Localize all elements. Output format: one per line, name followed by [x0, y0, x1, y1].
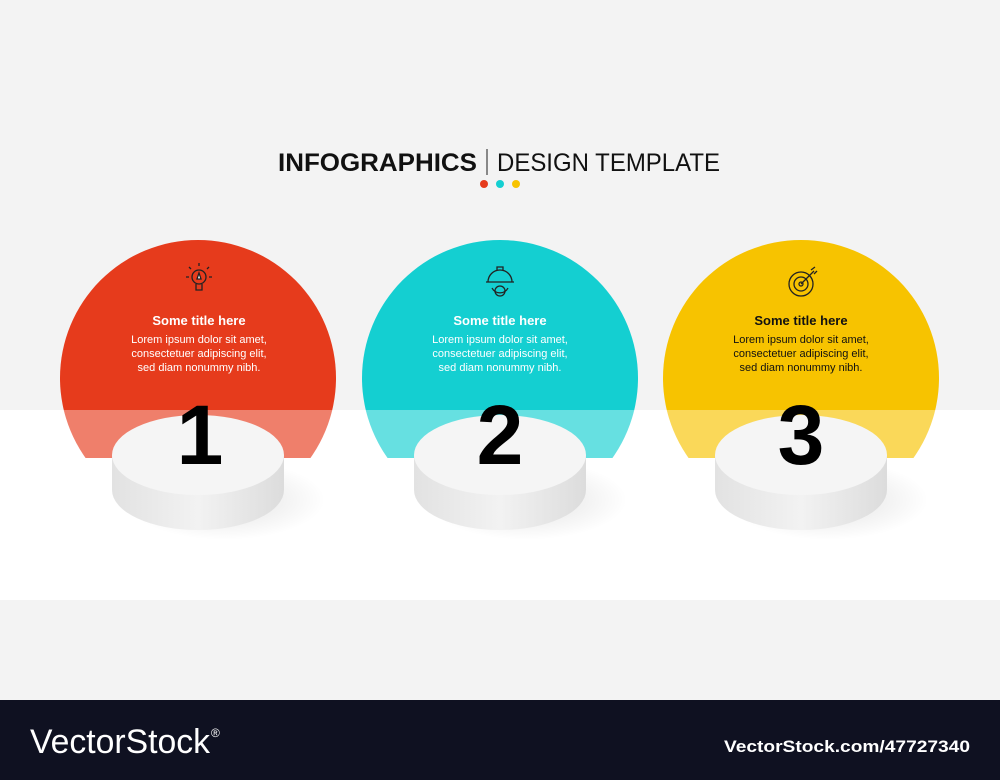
text: step 2: consectetuer adipiscing elit,: [432, 348, 568, 360]
text: step 1: Some title here: [152, 313, 246, 328]
number 1: 1: [177, 388, 223, 482]
icon: helmet gear: [486, 267, 514, 296]
title: [278, 149, 720, 177]
title: DESIGN TEMPLATE: [497, 149, 720, 177]
text: step 1: consectetuer adipiscing elit,: [131, 348, 267, 360]
footer: [0, 700, 1000, 780]
text: step 1: Lorem ipsum dolor sit amet,: [131, 334, 267, 346]
text: step 1: [131, 313, 267, 374]
panel: step 2: [362, 240, 638, 540]
panel: step 3: [663, 240, 939, 540]
text: step 2: Lorem ipsum dolor sit amet,: [432, 334, 568, 346]
footer: VectorStock: [30, 723, 211, 761]
number 3: 3: [778, 388, 824, 482]
pedestal 3: [715, 415, 928, 540]
footer: VectorStock.com/47727340: [724, 737, 970, 756]
text: step 3: sed diam nonummy nibh.: [740, 362, 862, 374]
pedestal 2: [414, 415, 627, 540]
icon: target: [789, 267, 817, 296]
title: INFOGRAPHICS: [278, 149, 477, 177]
text: step 2: [432, 313, 568, 374]
number 2: 2: [477, 388, 523, 482]
text: step 3: Lorem ipsum dolor sit amet,: [733, 334, 869, 346]
text: step 3: Some title here: [754, 313, 848, 328]
pedestal 1: [112, 415, 325, 540]
footer: ®: [211, 726, 220, 740]
title dots: [480, 180, 520, 188]
text: step 1: sed diam nonummy nibh.: [138, 362, 260, 374]
icon: light bulb: [186, 263, 212, 290]
text: step 3: consectetuer adipiscing elit,: [733, 348, 869, 360]
text: step 2: Some title here: [453, 313, 547, 328]
text: step 3: [733, 313, 869, 374]
text: step 2: sed diam nonummy nibh.: [439, 362, 561, 374]
panel: step 1: [60, 240, 336, 540]
